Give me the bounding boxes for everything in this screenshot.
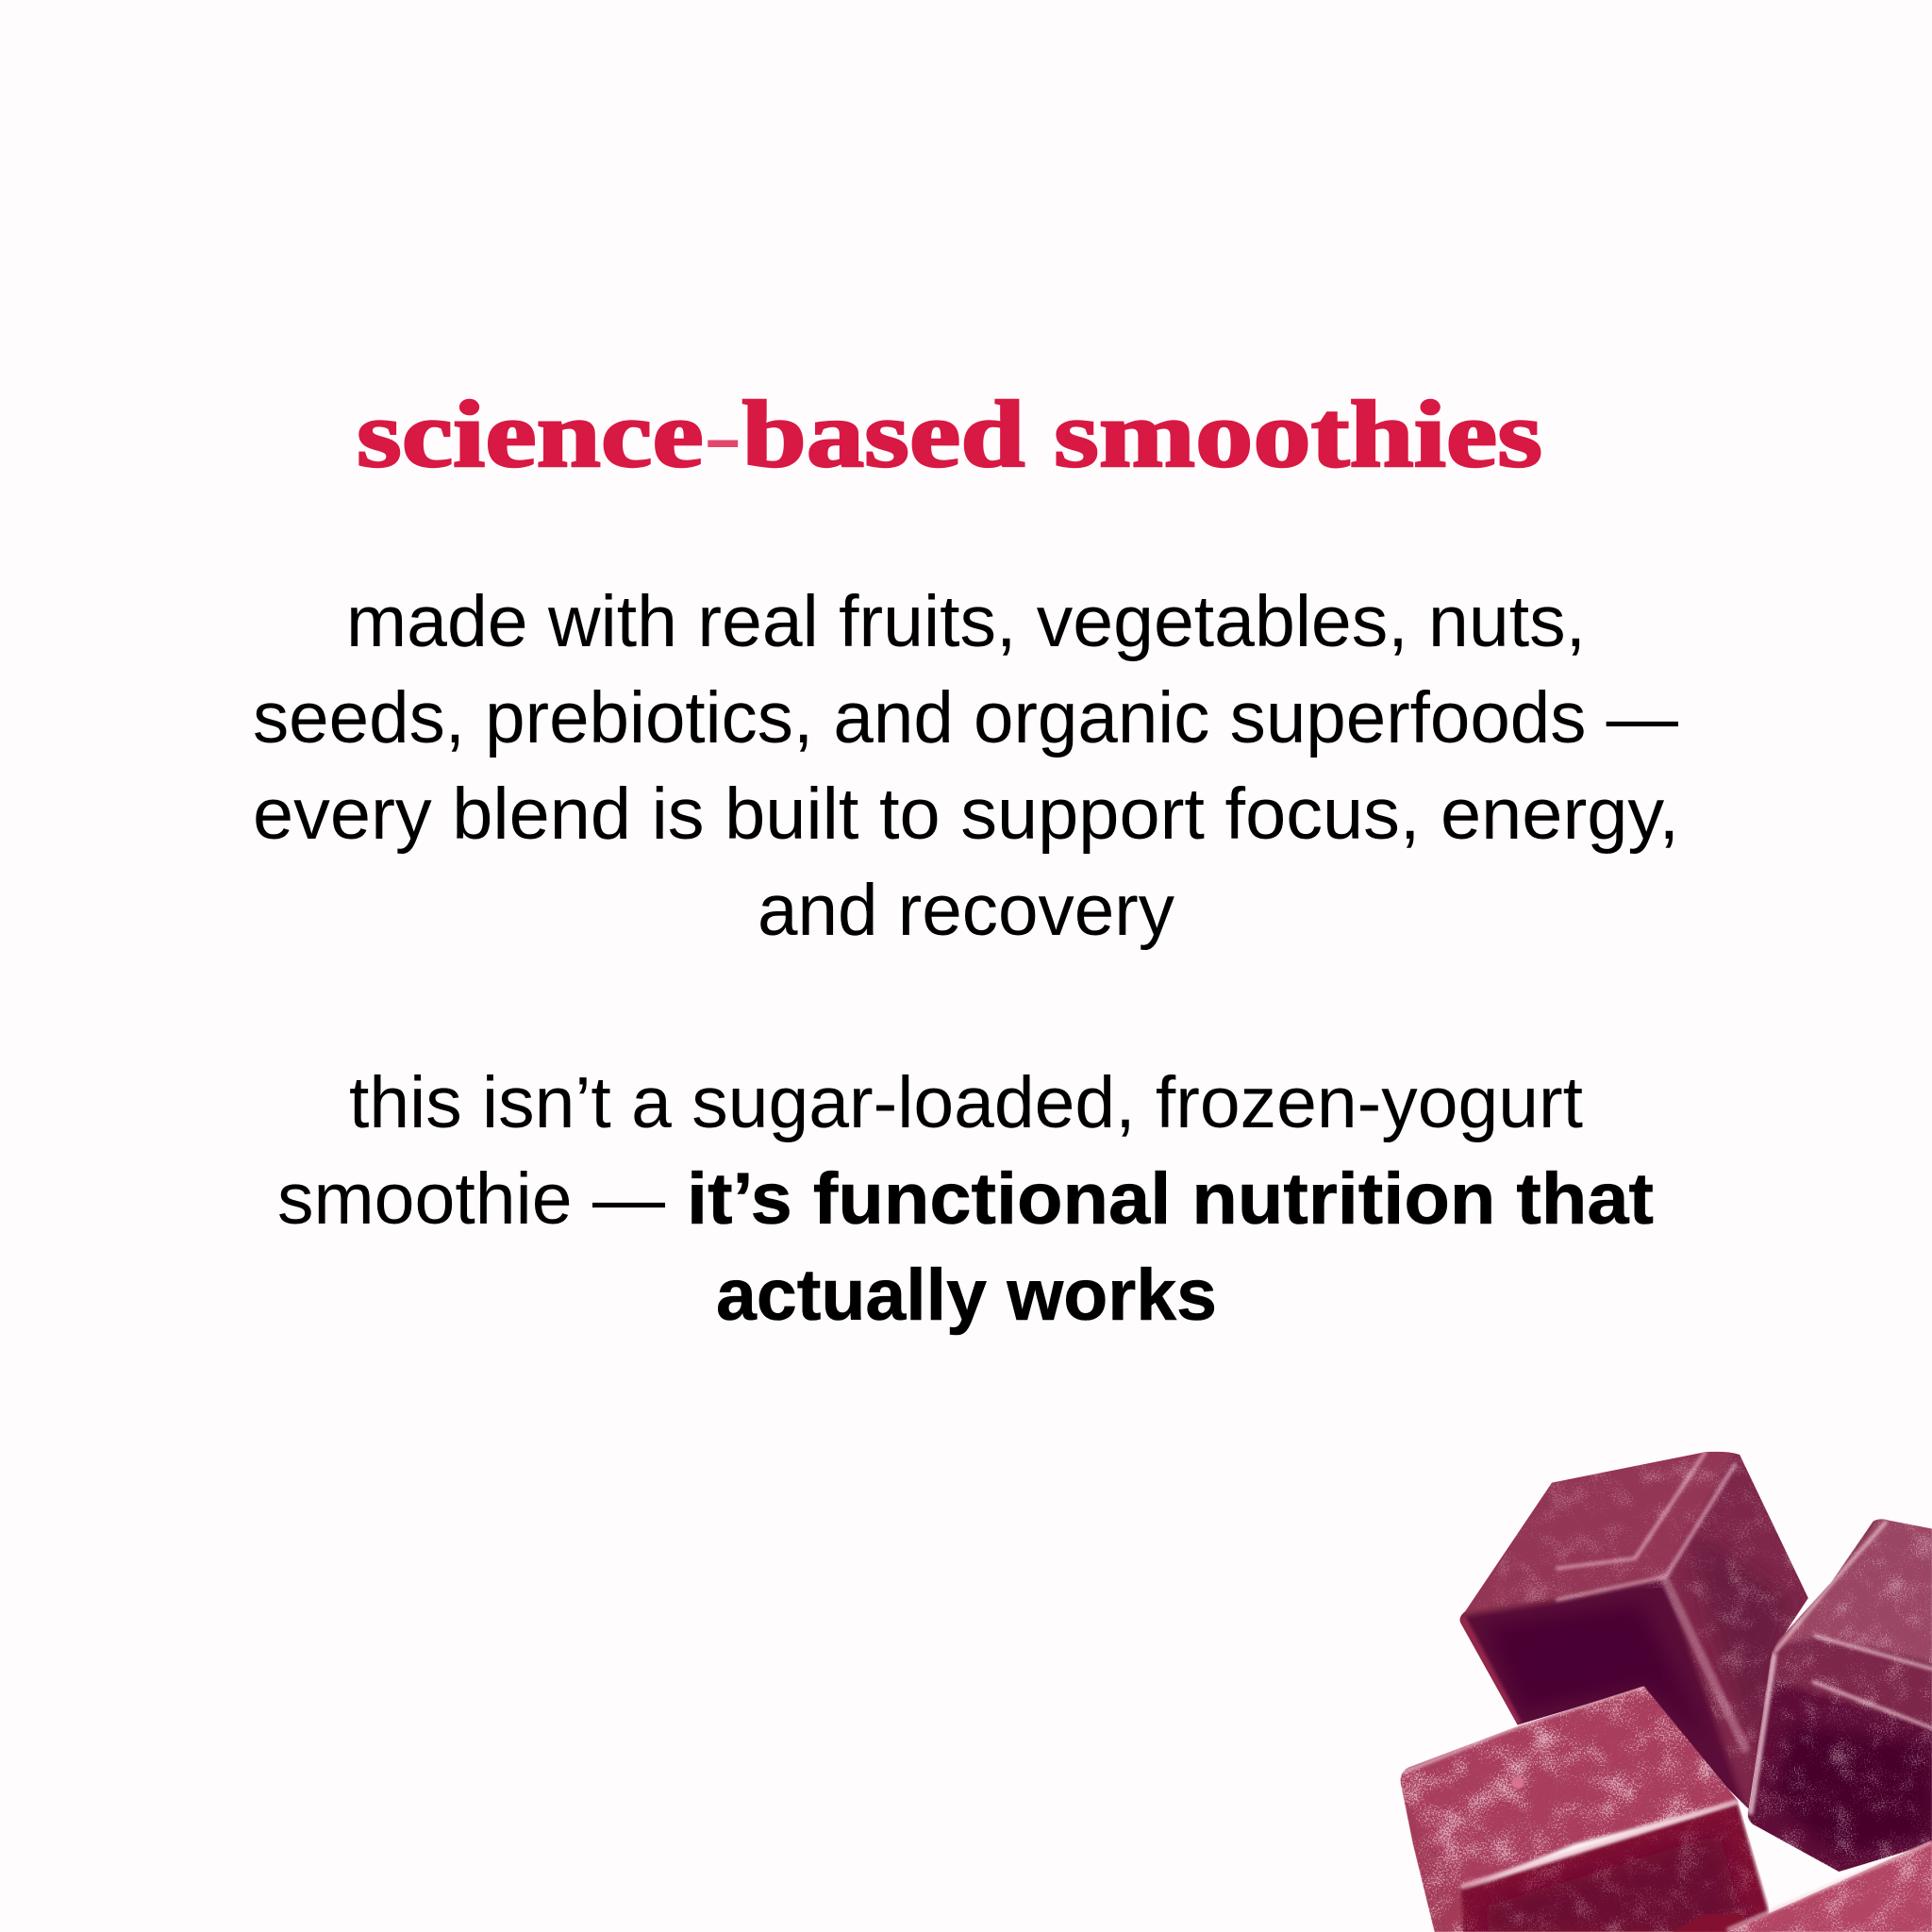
- text block: ingredients paragraph: [253, 581, 1679, 951]
- text block: functional nutrition paragraph: [277, 1062, 1654, 1336]
- cube: bottom left: [1388, 1679, 1777, 1932]
- title: science -based smoothies: [357, 381, 1542, 487]
- text block: functional nutrition paragraph: it’s functional nutrition that: [687, 1158, 1654, 1240]
- text block: ingredients paragraph: made with real fruits, vegetables, nuts,: [346, 581, 1586, 662]
- text block: ingredients paragraph: every blend is built to support focus, energy,: [253, 774, 1679, 855]
- cube: top centre: [1460, 1451, 1808, 1809]
- text block: functional nutrition paragraph: actually works: [716, 1255, 1217, 1336]
- image: frozen berry smoothie cubes: [1388, 1441, 1932, 1932]
- text block: functional nutrition paragraph: this isn’t a sugar-loaded, frozen-yogurt: [349, 1062, 1583, 1143]
- cube: bottom right: [1673, 1840, 1932, 1932]
- cube: right: [1738, 1514, 1932, 1876]
- text block: ingredients paragraph: seeds, prebiotics, and organic superfoods —: [253, 677, 1678, 758]
- text block: ingredients paragraph: and recovery: [758, 870, 1174, 951]
- text block: functional nutrition paragraph: smoothie —: [277, 1158, 665, 1240]
